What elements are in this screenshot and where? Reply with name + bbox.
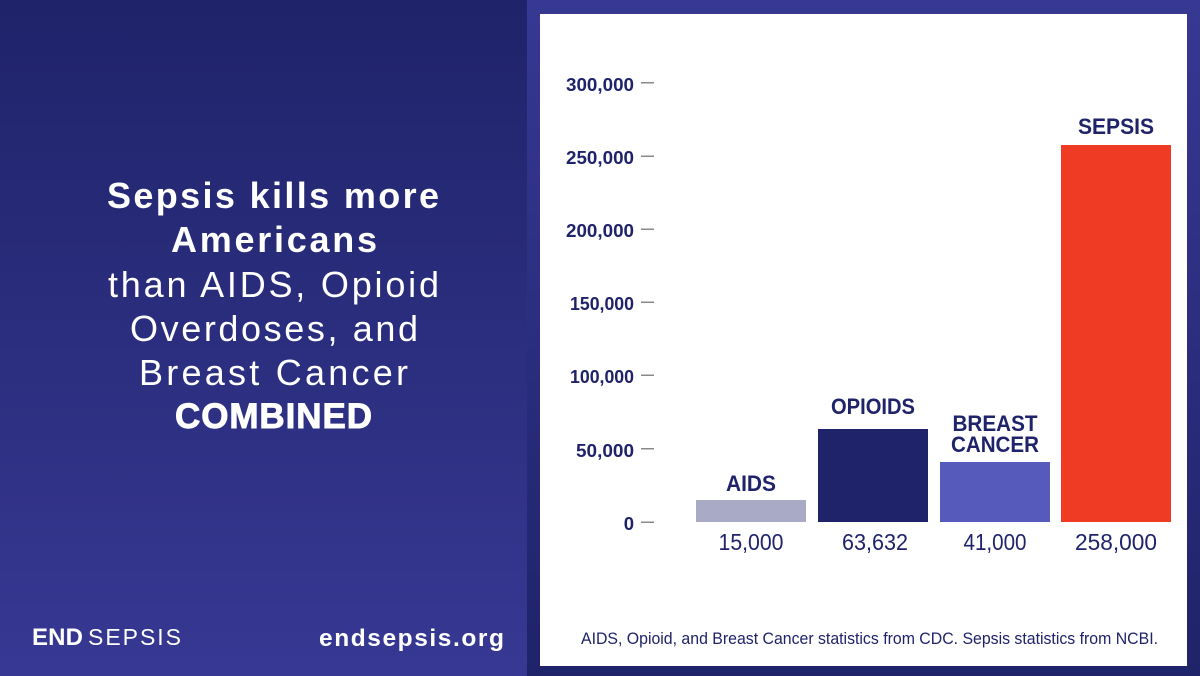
headline: Americans — [171, 219, 377, 260]
y axis: 250,000 — [566, 147, 634, 168]
y axis: 150,000 — [570, 293, 634, 314]
bar: Opioids: 63,632 — [842, 529, 908, 555]
y axis — [566, 74, 654, 534]
bar: AIDS: 15,000 — [718, 529, 784, 555]
headline: Overdoses, and — [130, 308, 418, 349]
panel: right chart background — [527, 0, 1200, 676]
headline — [107, 175, 439, 436]
y axis: 50,000 — [576, 440, 634, 461]
bar: Breast Cancer: CANCER — [951, 432, 1039, 457]
bar: Breast Cancer: 41,000 — [964, 529, 1026, 555]
bar: AIDS — [696, 471, 806, 555]
y axis: 0 — [624, 513, 634, 534]
y axis: 200,000 — [566, 220, 634, 241]
logo: End Sepsis: END — [32, 624, 83, 651]
bar: Breast Cancer: BREAST — [952, 411, 1038, 436]
bar: Sepsis — [1061, 114, 1171, 555]
bar: AIDS: AIDS — [726, 471, 776, 496]
logo: End Sepsis — [32, 624, 181, 651]
headline: Sepsis kills more — [107, 175, 439, 216]
headline: than AIDS, Opioid — [108, 264, 439, 305]
bar: Opioids: OPIOIDS — [831, 394, 915, 419]
bar: Sepsis: 258,000 — [1075, 529, 1157, 555]
headline: Breast Cancer — [139, 352, 408, 393]
source note: AIDS, Opioid, and Breast Cancer statistics from CDC. Sepsis statistics from NCBI. — [581, 630, 1158, 648]
y axis: 300,000 — [566, 74, 634, 95]
panel: left headline background — [0, 0, 527, 676]
logo: End Sepsis: SEPSIS — [88, 624, 181, 650]
bar: Sepsis: SEPSIS — [1078, 114, 1154, 139]
headline: COMBINED — [175, 397, 372, 436]
y axis: 100,000 — [570, 366, 634, 387]
bar: Breast Cancer — [940, 411, 1050, 555]
website url: endsepsis.org — [319, 625, 504, 652]
bar: Opioids — [818, 394, 928, 555]
